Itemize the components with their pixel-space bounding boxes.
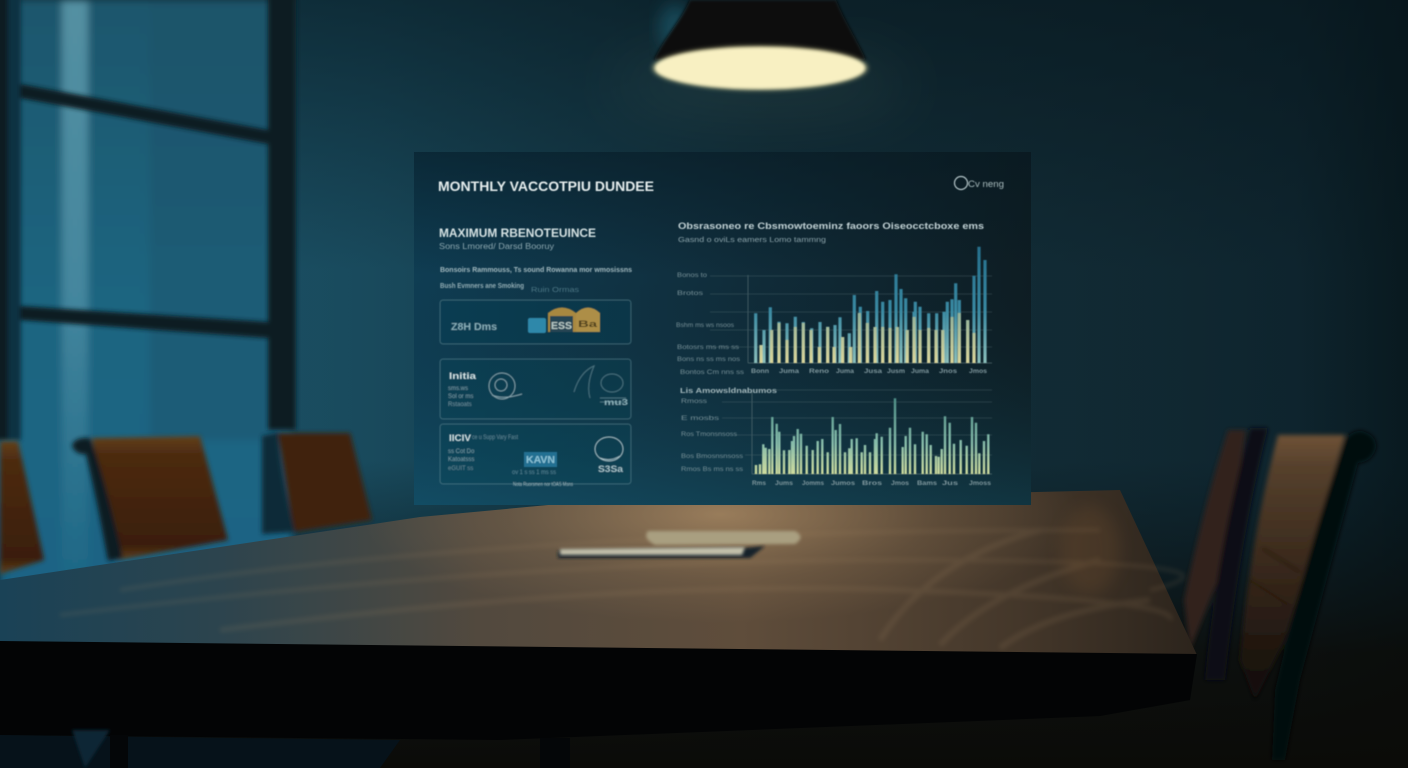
sketched emblem <box>489 373 522 399</box>
card 3: ce u Supp Vary Fast <box>472 435 518 441</box>
chart 1 month labels: Jusm <box>887 369 905 375</box>
blue data tag: ov 1 s ss 1 ms ss <box>512 470 556 476</box>
chart 1 axis labels: Bonos to <box>677 272 707 279</box>
chart 1 month labels: Jnos <box>939 369 958 375</box>
window with frames <box>0 0 296 600</box>
chart 1 month labels: Jusa <box>864 369 883 375</box>
left section heading: Ruin Ormas <box>531 287 580 294</box>
chart 1 heading <box>678 221 984 244</box>
card 1 <box>440 300 631 344</box>
chart 2 month labels: Bros <box>862 481 883 487</box>
chart 2 axis labels <box>681 398 744 473</box>
brand logo: Cv neng <box>968 179 1004 189</box>
left section heading: MAXIMUM RBENOTEUINCE <box>439 228 596 240</box>
card 2: sms.ws <box>448 386 468 392</box>
chart 2 axis labels: E mosbs <box>681 415 720 422</box>
chart 1 axis labels: Bshm ms ws nsoos <box>676 322 735 329</box>
sketched stamp <box>595 437 624 474</box>
chart 2 axis labels: Ros Tmonsnsoss <box>681 431 738 438</box>
card 2: Initia <box>449 371 477 381</box>
chart 1 month labels <box>751 369 988 375</box>
footnote: Nota Ruorsmen nor tOAS Msns <box>513 482 573 488</box>
card 2: Rstaoats <box>448 402 472 408</box>
chart 2 axis labels: Rmoss <box>681 398 708 405</box>
dashboard title: MONTHLY VACCOTPIU DUNDEE <box>438 179 654 194</box>
chart 1 month labels: Juma <box>779 369 800 375</box>
chart 2 month labels: Jumos <box>831 481 856 487</box>
chairs behind the table, left <box>0 432 372 574</box>
left section heading: Bonsoirs Rammouss, Ts sound Rowanna mor wmosissns <box>440 267 632 274</box>
chart 1 heading: Obsrasoneo re Cbsmowtoeminz faoors Oiseocctcboxe ems <box>678 221 984 232</box>
chart 1 axis labels <box>676 272 745 376</box>
wood grain <box>60 530 1183 648</box>
chart 2 month labels: Jmos <box>891 481 910 487</box>
card 2: Sol or ms <box>448 394 473 400</box>
brand logo <box>954 176 1004 190</box>
chart 1 month labels: Jmos <box>969 369 988 375</box>
card 3: IICIV <box>449 433 471 443</box>
pendant lamp <box>610 0 910 119</box>
chart 1 axis labels: Brotos <box>677 290 704 297</box>
blue tile <box>528 318 546 333</box>
chart 2 month labels: Jomms <box>802 481 825 487</box>
gold badges: Ba <box>578 319 599 329</box>
panel content <box>438 176 1004 488</box>
chart 2 month labels: Jums <box>775 481 794 487</box>
tablet and papers on the table <box>558 531 800 558</box>
chart 2 month labels: Jus <box>942 481 959 487</box>
card 3 <box>440 424 631 484</box>
card 3: Katoatsss <box>448 457 474 463</box>
chart 2 month labels: Rms <box>752 481 767 487</box>
chart 1 month labels: Juma <box>911 369 930 375</box>
conference table <box>0 490 1197 768</box>
sketched stamp: S3Sa <box>598 464 624 474</box>
chart 1 heading: Gasnd o oviLs eamers Lomo tammng <box>678 237 826 244</box>
gold badges: ESS <box>551 321 572 332</box>
blue data tag: KAVN <box>526 455 555 466</box>
chart 1 axis labels: Bons ns ss ms nos <box>677 356 741 363</box>
left section heading: Sons Lmored/ Darsd Booruy <box>439 242 554 251</box>
chart 2 axis labels: Rmos Bs ms ns ss <box>681 466 744 473</box>
left section heading: Bush Evmners ane Smoking <box>440 283 524 290</box>
card 3: eGUIT ss <box>448 466 473 472</box>
gold badges <box>548 308 600 332</box>
chart 2 heading: Lis Amowsldnabumos <box>680 386 777 395</box>
chart 1 axis labels: Botosrs ms ms ss <box>677 344 740 351</box>
dashboard panel <box>414 152 1031 505</box>
chart 2 axis labels: Bos Bmosnsnsoss <box>681 453 744 460</box>
chart 2 month labels <box>752 481 992 487</box>
chair at right <box>1184 428 1376 760</box>
faint sketched emblem <box>574 366 626 402</box>
chart 2: lower bar chart <box>681 390 992 487</box>
chart 1: upper bar chart <box>676 247 992 376</box>
chart 1 axis labels: Bontos Cm nns ss <box>680 369 745 376</box>
left section heading <box>439 228 632 294</box>
chart 1 month labels: Reno <box>809 369 829 375</box>
card 2: mu3 <box>604 398 629 407</box>
card 3: ss Cot Do <box>448 449 475 455</box>
card 1: Z8H Dms <box>451 322 497 333</box>
window mullions <box>0 0 296 440</box>
card 2 <box>440 359 631 419</box>
chart 2 month labels: Jmoss <box>969 481 992 487</box>
chart 2 month labels: Bams <box>917 481 938 487</box>
table front edge <box>0 641 1197 740</box>
chart 1 month labels: Bonn <box>751 369 769 375</box>
blue data tag <box>512 452 557 476</box>
chart 1 month labels: Juma <box>836 369 855 375</box>
